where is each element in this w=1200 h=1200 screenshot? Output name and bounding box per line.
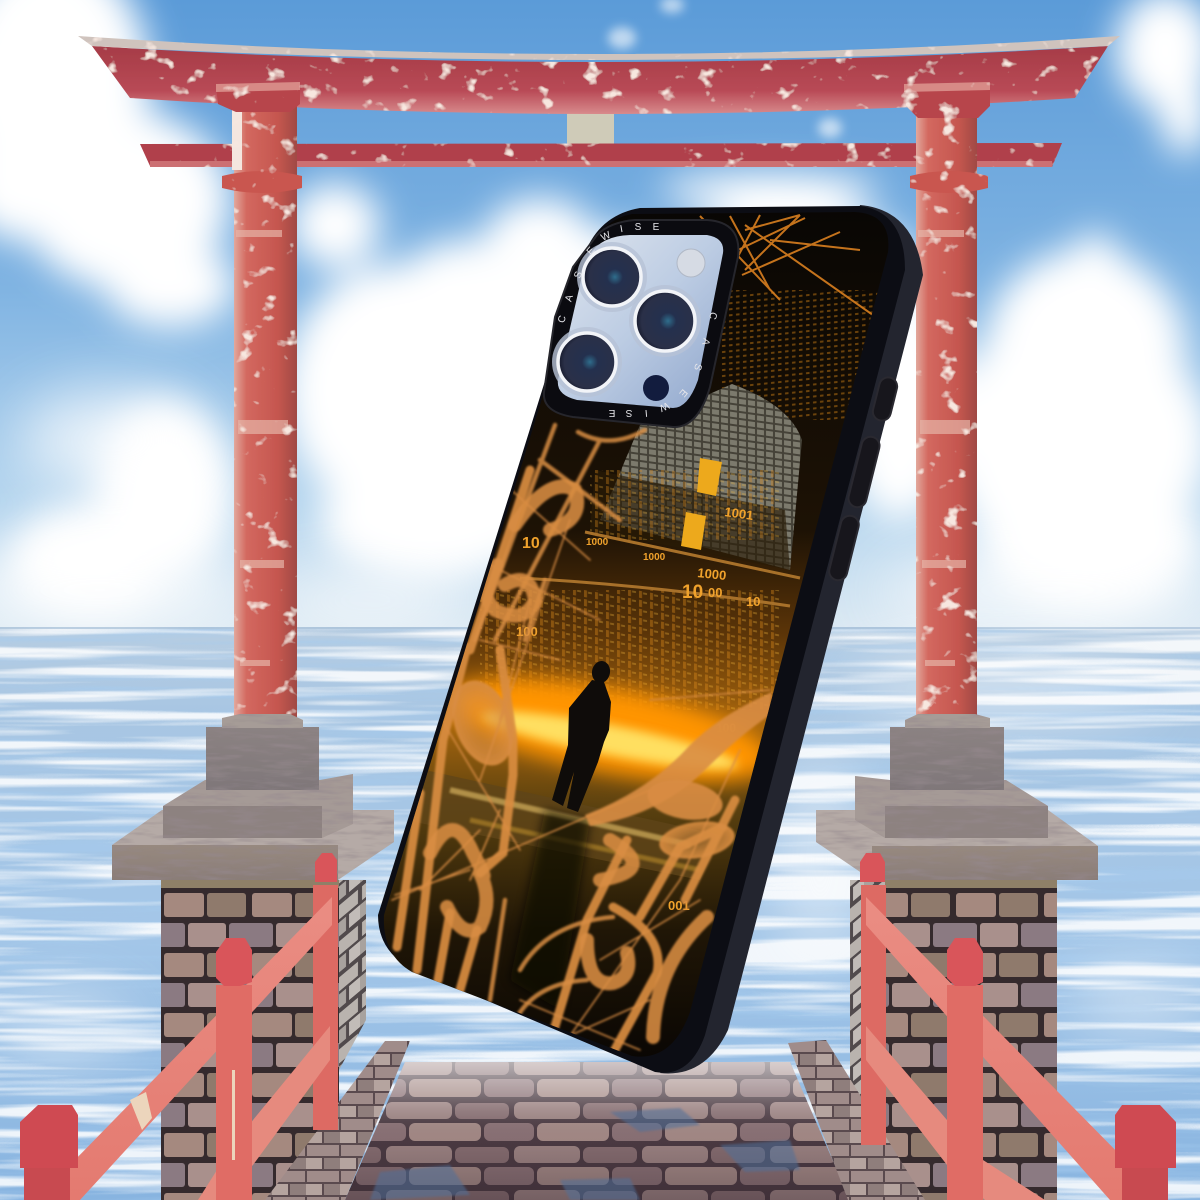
upper rail — [40, 897, 332, 1200]
binary text: 10 — [682, 582, 703, 603]
phone with case — [370, 200, 923, 1073]
binary text: 10 — [746, 594, 760, 609]
phone side blur — [660, 205, 923, 1073]
upper rail — [866, 897, 1160, 1200]
silhouette — [552, 660, 612, 812]
brand ring text: E — [608, 407, 615, 418]
fan lines — [700, 215, 880, 320]
left brick pillar — [161, 880, 366, 1200]
glow — [444, 663, 764, 796]
binary text: 1001 — [724, 504, 754, 523]
end post cap — [1115, 1105, 1176, 1168]
floor shadow — [511, 806, 595, 976]
brand ring text: A — [699, 337, 712, 346]
binary text: 00 — [708, 585, 722, 600]
lower deck — [405, 770, 720, 880]
end post cap — [20, 1105, 78, 1168]
brand ring text: I — [619, 224, 624, 235]
sensor — [643, 375, 669, 401]
top beam — [78, 36, 1120, 114]
brand ring text: S — [572, 270, 585, 280]
brand ring text: S — [691, 362, 704, 372]
sea — [0, 627, 1200, 1200]
brand ring text: E — [585, 245, 598, 257]
brand ring text: I — [644, 407, 648, 418]
camera lenses — [552, 242, 701, 397]
front post — [216, 985, 252, 1200]
clouds — [0, 0, 1200, 630]
binary text: 1000 — [586, 537, 609, 548]
brand ring text: E — [676, 387, 689, 399]
brand ring text — [556, 222, 719, 418]
right pillar — [904, 82, 990, 718]
orange swirls — [392, 425, 772, 1053]
left railing — [20, 853, 338, 1200]
yellow signs — [681, 458, 722, 550]
back post — [861, 885, 886, 1145]
camera island — [544, 220, 738, 427]
data cylinder — [600, 384, 802, 570]
light bands — [520, 532, 800, 606]
brand ring text: E — [653, 222, 660, 233]
phone case body — [378, 206, 905, 1073]
lower beam — [140, 143, 1062, 167]
flash — [677, 249, 705, 277]
lower rail — [866, 1026, 1045, 1200]
binary text: 1000 — [697, 565, 727, 583]
left curb — [265, 1041, 410, 1200]
left pillar — [216, 82, 302, 718]
front post — [947, 985, 983, 1200]
brand ring text: W — [657, 399, 671, 413]
centre strut — [567, 104, 614, 144]
side buttons — [827, 375, 899, 582]
right railing — [860, 853, 1176, 1200]
right curb — [788, 1040, 925, 1200]
amber code wall — [720, 290, 880, 420]
sky background — [0, 0, 1200, 630]
brand ring text: C — [556, 314, 569, 324]
back post — [313, 885, 338, 1130]
binary text: 1000 — [643, 552, 666, 563]
brand ring text: W — [599, 230, 613, 244]
binary text: 001 — [668, 898, 690, 913]
brand ring text: S — [635, 222, 642, 233]
screen artwork — [370, 200, 900, 1070]
binary text: 10 — [522, 535, 540, 552]
blobs — [442, 672, 772, 863]
binary text: 100 — [516, 624, 538, 639]
brand ring text: C — [706, 311, 719, 320]
lower rail — [198, 1026, 330, 1200]
torii gate — [78, 36, 1120, 718]
right brick pillar — [850, 880, 1057, 1200]
left stone base — [112, 714, 394, 880]
brand ring text: A — [563, 293, 576, 303]
brand ring text: S — [625, 407, 632, 418]
stone walkway — [265, 1040, 925, 1200]
right stone base — [816, 714, 1098, 880]
binary text — [516, 504, 760, 913]
binary text: 100 — [716, 721, 736, 735]
